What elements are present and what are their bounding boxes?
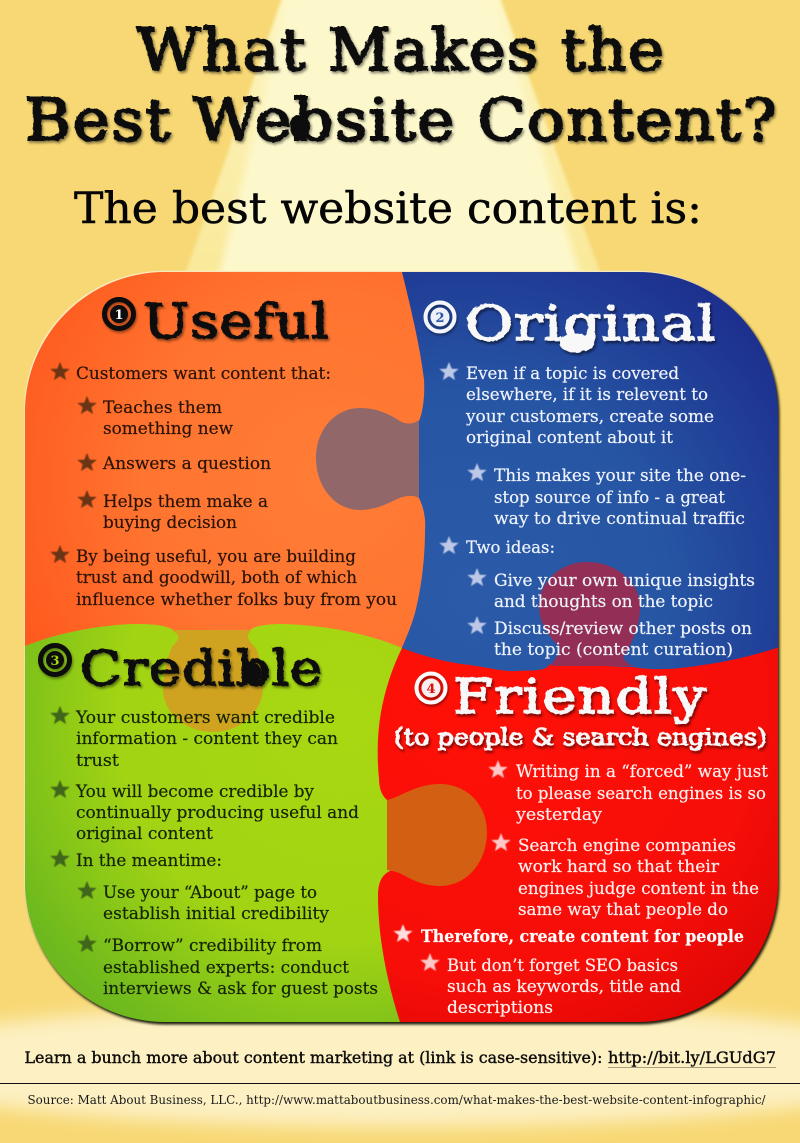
number badge 3 <box>40 646 70 674</box>
bullet: same way that people do <box>518 900 728 920</box>
bullet: establish initial credibility <box>103 904 329 924</box>
heading: friendly: (to people & search engines) <box>394 725 767 751</box>
bullet: “Borrow” credibility from <box>103 936 322 956</box>
bullet: and thoughts on the topic <box>494 592 713 612</box>
bullet <box>468 464 746 529</box>
bullet: trust <box>76 751 119 771</box>
bullet <box>51 546 397 610</box>
knob: original-friendly overlap <box>539 562 640 666</box>
knob: useful-credible overlap <box>163 630 263 732</box>
bullet: yesterday <box>515 805 602 825</box>
bullet: Writing in a “forced” way just <box>516 762 768 782</box>
number badge 4: 4 <box>426 682 436 697</box>
bullet: continually producing useful and <box>76 803 359 823</box>
bullet: buying decision <box>103 513 237 533</box>
bullet: Discuss/review other posts on <box>494 619 752 639</box>
bullet: This makes your site the one- <box>494 466 746 486</box>
bullet: elsewhere, if it is relevent to <box>466 385 708 405</box>
bullet: interviews & ask for guest posts <box>103 979 378 999</box>
heading: credible: Credible <box>80 641 323 697</box>
bullet: something new <box>103 419 233 439</box>
subtitle: The best website content is: <box>74 184 702 234</box>
bullet: stop source of info - a great <box>494 488 725 508</box>
bullet: trust and goodwill, both of which <box>76 568 357 588</box>
bullet: But don’t forget SEO basics <box>447 956 678 976</box>
bullet <box>492 834 759 920</box>
panel rim and shadow <box>24 271 780 1024</box>
bullet <box>78 490 268 533</box>
bullet: the topic (content curation) <box>494 640 733 660</box>
bullet: In the meantime: <box>76 851 222 871</box>
bullet <box>468 568 755 612</box>
piece: friendly (red) <box>378 648 778 1022</box>
bullet: Give your own unique insights <box>494 571 755 591</box>
bullet: Helps them make a <box>103 492 268 512</box>
heading: friendly <box>394 669 767 751</box>
bullet: Even if a topic is covered <box>466 364 679 384</box>
knob: credible-friendly overlap <box>387 784 487 886</box>
bullet <box>468 616 752 660</box>
bullet: engines judge content in the <box>518 879 759 899</box>
text: friendly bullets <box>394 760 768 1018</box>
bullet: Your customers want credible <box>75 708 335 728</box>
bullet: Search engine companies <box>518 836 736 856</box>
bullet <box>78 934 378 999</box>
bullet: therefore: Therefore, create content for people <box>421 927 744 947</box>
bullet: Customers want content that: <box>76 364 331 384</box>
number badge 2: 2 <box>435 311 445 326</box>
bullet <box>51 706 338 771</box>
bullet: information - content they can <box>76 729 338 749</box>
number badge 2 <box>426 302 454 332</box>
bullet: By being useful, you are building <box>76 547 356 567</box>
bullet: Use your “About” page to <box>103 883 317 903</box>
piece: original (blue) <box>402 272 778 672</box>
text: credible bullets <box>51 706 378 999</box>
source line: Source: Matt About Business, LLC., http://www.mattaboutbusiness.com/what-makes-the-best-website-content-infographic/ <box>28 1093 766 1107</box>
bullet: way to drive continual traffic <box>494 509 745 529</box>
title: Best Website Content? <box>25 86 778 154</box>
bullet: work hard so that their <box>518 857 720 877</box>
number badge 4 <box>416 674 446 702</box>
text: original bullets <box>440 362 755 660</box>
bullet: your customers, create some <box>465 407 714 427</box>
call to action: Learn a bunch more about content marketing at (link is case-sensitive): <box>24 1048 602 1067</box>
bullet <box>489 760 768 825</box>
heading: original: Original <box>465 296 717 352</box>
piece: useful (orange) <box>25 272 426 648</box>
bullet: influence whether folks buy from you <box>76 590 397 610</box>
number badge 1: 1 <box>114 308 124 323</box>
bullet: Two ideas: <box>466 538 555 558</box>
heading: useful: Useful <box>143 294 330 350</box>
bullet: such as keywords, title and <box>447 977 681 997</box>
bullet: descriptions <box>447 998 553 1018</box>
title: What Makes the <box>137 16 666 84</box>
text: useful bullets <box>51 362 397 610</box>
bullet: original content about it <box>466 428 673 448</box>
bullet <box>78 396 233 439</box>
puzzle panel <box>0 260 800 1040</box>
bullet: original content <box>76 824 213 844</box>
piece: credible (green) <box>25 624 402 1022</box>
bullet <box>78 882 329 924</box>
spotlight floor glow <box>0 1003 800 1127</box>
knob: useful-original overlap <box>316 408 419 510</box>
title <box>25 16 778 154</box>
bullet: Answers a question <box>102 454 271 474</box>
bullet <box>440 362 714 448</box>
number badge 3: 3 <box>50 654 60 669</box>
heading: friendly: Friendly <box>453 669 707 725</box>
bullet <box>51 780 359 844</box>
bullet: established experts: conduct <box>103 958 349 978</box>
call to action: http://bit.ly/LGUdG7 <box>608 1048 776 1067</box>
bullet <box>421 954 681 1018</box>
spotlight beam <box>183 0 603 290</box>
bullet: to please search engines is so <box>516 784 766 804</box>
bullet: You will become credible by <box>75 782 314 802</box>
bullet: Teaches them <box>103 398 222 418</box>
number badge 1 <box>104 300 134 328</box>
